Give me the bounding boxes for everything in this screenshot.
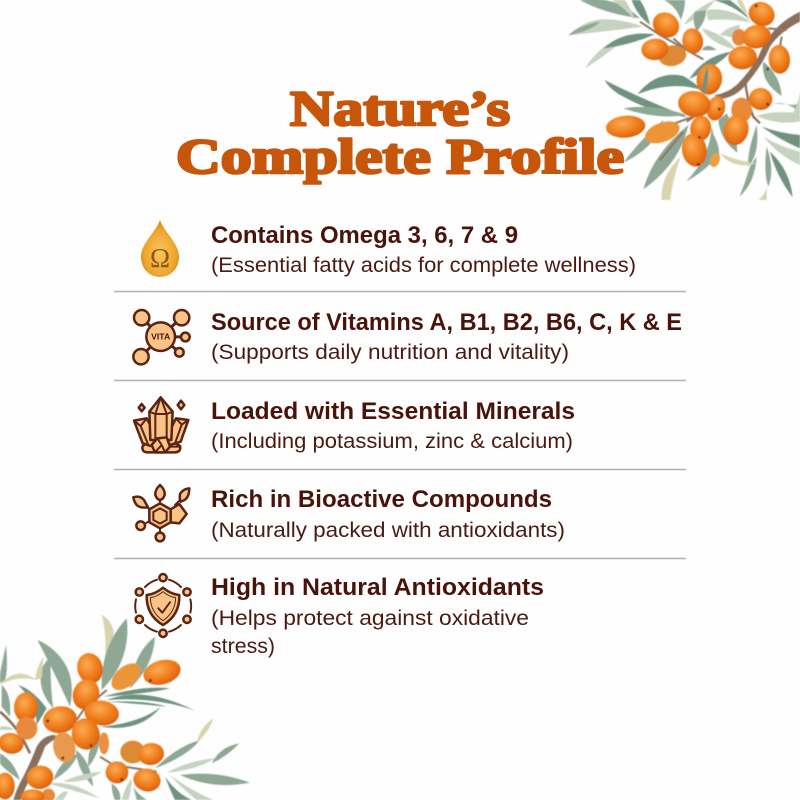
icon: vitamin molecule: VITA [151, 332, 171, 342]
branch [715, 12, 800, 99]
heading: minerals: Loaded with Essential Minerals [211, 398, 575, 425]
row: minerals [134, 397, 575, 453]
text: bioactive description: (Naturally packed with antioxidants) [211, 519, 565, 542]
text: antioxidants description: (Helps protect against oxidative [211, 607, 529, 630]
row: omega [141, 220, 636, 277]
text: antioxidants description [211, 607, 529, 658]
heading: antioxidants: High in Natural Antioxidants [211, 574, 544, 601]
icon: omega oil drop: Ω [150, 243, 170, 273]
row: vitamins [133, 309, 682, 364]
title: Complete Profile [176, 128, 624, 184]
illustration: top-right sea buckthorn branch [568, 0, 800, 200]
icon: crystals [134, 397, 188, 452]
icon: vitamin molecule [133, 310, 190, 364]
text: antioxidants description: stress) [211, 635, 275, 658]
berries [74, 650, 106, 686]
berries [648, 7, 684, 43]
row: bioactive [133, 485, 565, 542]
title: Nature’s [290, 80, 510, 136]
icon: bioactive molecule with leaves [133, 485, 189, 541]
row: antioxidants [135, 574, 544, 658]
icon: omega oil drop [141, 220, 179, 277]
icon: shield with check [135, 574, 191, 637]
title [176, 80, 624, 184]
branch [13, 735, 57, 800]
illustration: bottom-left sea buckthorn branch [0, 615, 250, 800]
heading: vitamins: Source of Vitamins A, B1, B2, B6, C, K & E [211, 309, 682, 336]
text: vitamins description: (Supports daily nutrition and vitality) [211, 341, 569, 364]
panel: feature list [114, 220, 686, 658]
heading: omega: Contains Omega 3, 6, 7 & 9 [211, 222, 518, 249]
text: omega description: (Essential fatty acids for complete wellness) [211, 254, 636, 277]
heading: bioactive: Rich in Bioactive Compounds [211, 486, 552, 513]
text: minerals description: (Including potassium, zinc & calcium) [211, 430, 573, 453]
